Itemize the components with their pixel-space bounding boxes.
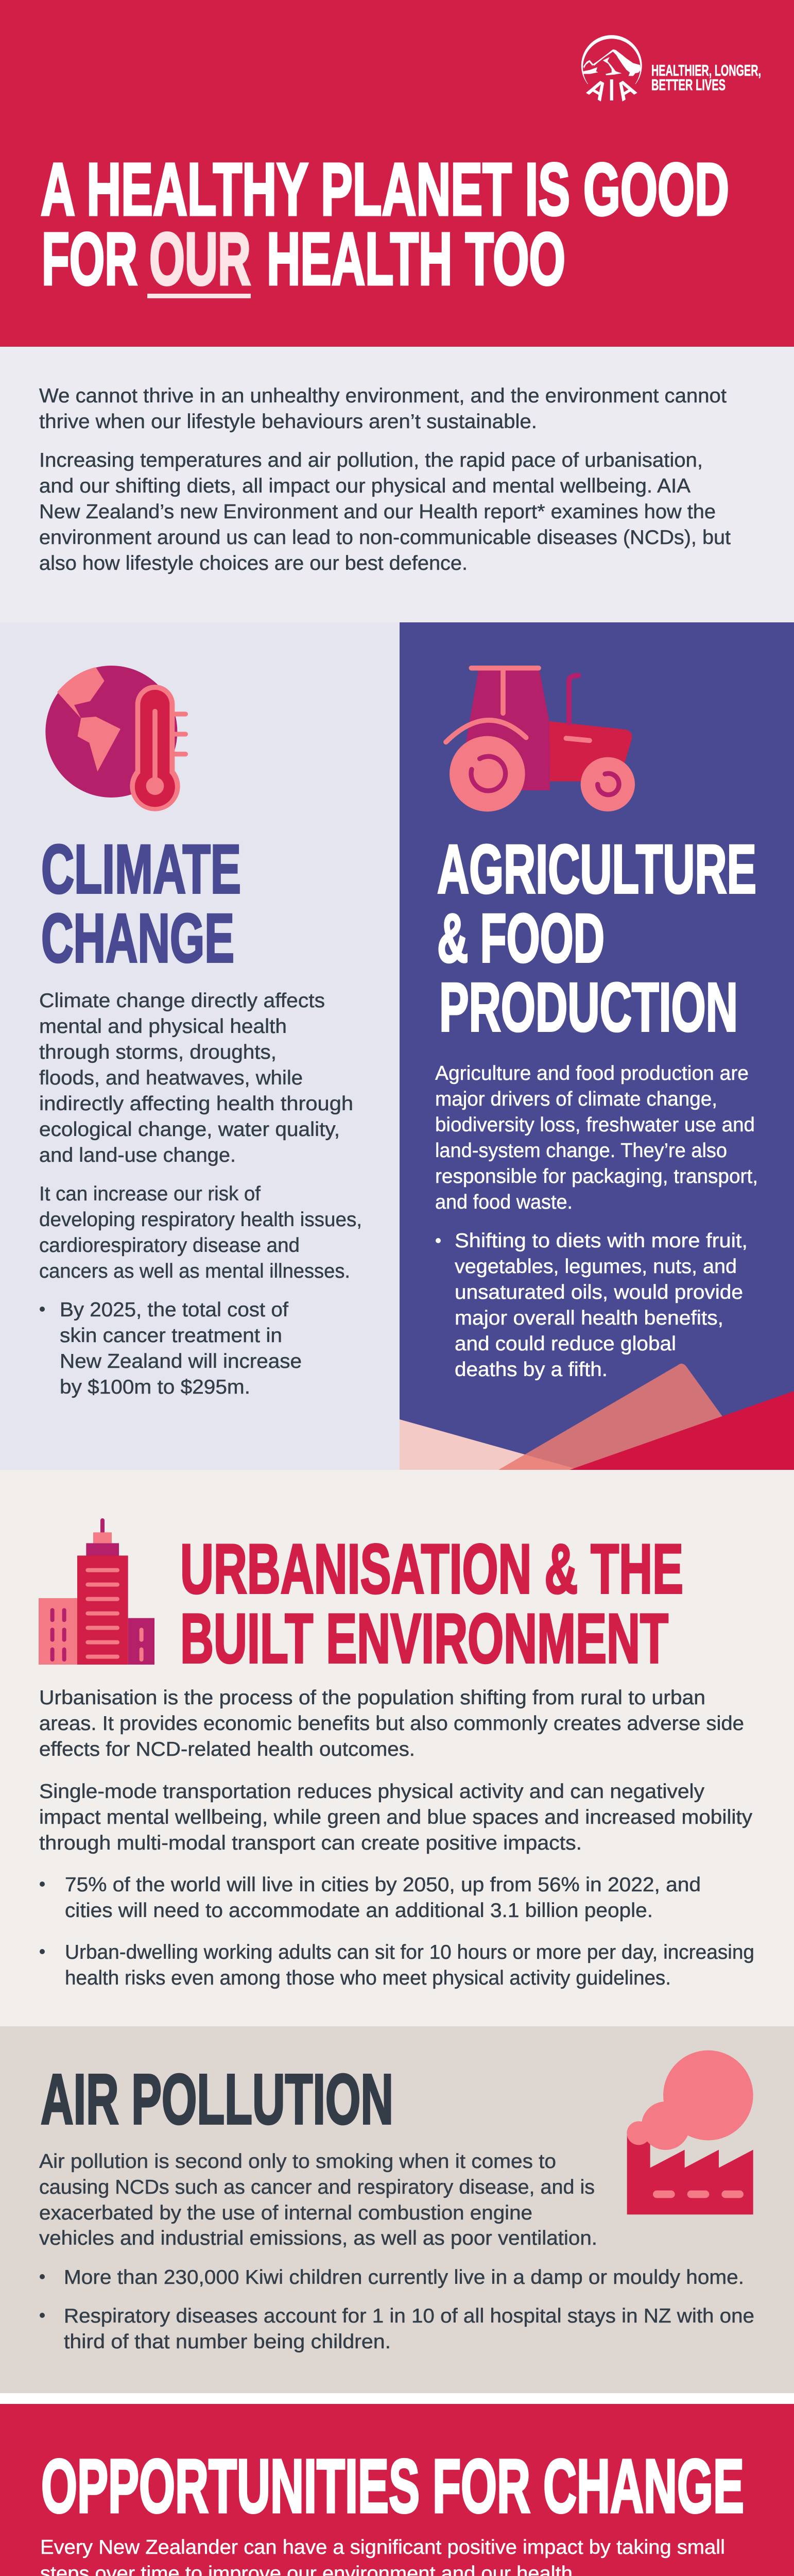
decorative corner shapes: agriculture [400, 1364, 794, 1470]
heading: urbanisation [180, 1530, 683, 1677]
icon: AIA logo: I [609, 73, 615, 107]
climate bullet: skin cancer treatment in [60, 1325, 282, 1347]
heading: air pollution: AIR POLLUTION [41, 2060, 393, 2139]
urbanisation bullet 2: Urban-dwelling working adults can sit for 10 hours or more per day, increasing [65, 1941, 754, 1963]
climate paragraph 1: Climate change directly affects [39, 990, 325, 1012]
urbanisation paragraph 1: areas. It provides economic benefits but also commonly creates adverse side [39, 1713, 744, 1735]
urbanisation paragraph 2: through multi-modal transport can create positive impacts. [39, 1832, 582, 1854]
tagline: BETTER LIVES [651, 76, 726, 94]
climate paragraph 2: developing respiratory health issues, [39, 1209, 362, 1231]
climate paragraph 1: indirectly affecting health through [39, 1093, 353, 1115]
title: FOR [42, 217, 137, 300]
climate bullet: By 2025, the total cost of [60, 1299, 288, 1321]
air pollution bullet 1: More than 230,000 Kiwi children currently live in a damp or mouldy home. [64, 2266, 744, 2289]
urbanisation bullet 1 [40, 1874, 701, 1922]
agriculture bullet [436, 1230, 748, 1381]
agriculture bullet: vegetables, legumes, nuts, and [455, 1256, 737, 1278]
heading: agriculture and food production: & FOOD [437, 900, 605, 977]
heading: climate change: CLIMATE [41, 831, 241, 908]
urbanisation bullet 1: 75% of the world will live in cities by 2050, up from 56% in 2022, and [65, 1874, 701, 1896]
climate paragraph 2 [39, 1183, 362, 1282]
climate paragraph 1: and land-use change. [39, 1144, 236, 1166]
climate paragraph 1 [39, 990, 353, 1166]
agriculture bullet: Shifting to diets with more fruit, [455, 1230, 748, 1252]
air pollution paragraph: Air pollution is second only to smoking when it comes to [39, 2150, 556, 2173]
agriculture paragraph: major drivers of climate change, [435, 1088, 717, 1110]
intro paragraph 1 [39, 385, 727, 433]
panel: agriculture and food production [400, 622, 794, 1470]
air pollution paragraph: exacerbated by the use of internal combustion engine [39, 2202, 532, 2224]
air pollution bullet 2: third of that number being children. [64, 2331, 391, 2353]
icon: AIA logo [581, 35, 642, 107]
urbanisation paragraph 1: effects for NCD-related health outcomes. [39, 1738, 415, 1760]
icon: AIA logo: A [610, 73, 641, 107]
climate paragraph 1: floods, and heatwaves, while [39, 1067, 303, 1089]
intro paragraph 1: thrive when our lifestyle behaviours aren’t sustainable. [39, 411, 537, 433]
urbanisation bullet 2: health risks even among those who meet physical activity guidelines. [65, 1967, 671, 1989]
agriculture paragraph [435, 1062, 758, 1213]
urbanisation paragraph 1: Urbanisation is the process of the population shifting from rural to urban [39, 1687, 705, 1709]
climate paragraph 2: cardiorespiratory disease and [39, 1234, 300, 1257]
opportunities subtext: Every New Zealander can have a significant positive impact by taking small [40, 2536, 725, 2558]
panel: opportunities for change [0, 2404, 794, 2576]
climate bullet [40, 1299, 302, 1398]
title [41, 148, 729, 300]
panel: header [0, 0, 794, 347]
intro paragraph 2 [39, 449, 731, 574]
icon: AIA logo: A [582, 73, 613, 107]
urbanisation paragraph 2: impact mental wellbeing, while green and blue spaces and increased mobility [39, 1806, 753, 1828]
agriculture bullet: unsaturated oils, would provide [455, 1281, 743, 1303]
urbanisation paragraph 2: Single-mode transportation reduces physical activity and can negatively [39, 1781, 705, 1803]
climate bullet: by $100m to $295m. [60, 1376, 250, 1398]
agriculture bullet: deaths by a fifth. [455, 1359, 608, 1381]
urbanisation paragraph 1 [39, 1687, 744, 1760]
icon: tractor [446, 668, 635, 811]
agriculture paragraph: Agriculture and food production are [435, 1062, 749, 1084]
climate bullet: New Zealand will increase [60, 1350, 302, 1372]
agriculture paragraph: and food waste. [435, 1191, 573, 1213]
icon: globe with thermometer [45, 666, 185, 811]
icon: city buildings [39, 1520, 154, 1665]
climate paragraph 2: It can increase our risk of [39, 1183, 261, 1205]
intro paragraph 2: New Zealand’s new Environment and our Health report* examines how the [39, 501, 716, 523]
air pollution paragraph: vehicles and industrial emissions, as well as poor ventilation. [39, 2227, 597, 2249]
urbanisation paragraph 2 [39, 1781, 753, 1854]
heading: climate change [41, 831, 241, 977]
agriculture paragraph: biodiversity loss, freshwater use and [435, 1114, 755, 1136]
tagline [651, 61, 761, 94]
urbanisation bullet 1: cities will need to accommodate an additional 3.1 billion people. [65, 1900, 653, 1922]
climate paragraph 2: cancers as well as mental illnesses. [39, 1260, 350, 1282]
climate paragraph 1: ecological change, water quality, [39, 1118, 340, 1141]
air pollution bullet 2 [40, 2305, 754, 2353]
heading: climate change: CHANGE [41, 900, 234, 977]
intro paragraph 2: also how lifestyle choices are our best defence. [39, 552, 468, 574]
heading: agriculture and food production [437, 831, 756, 1046]
panel: air pollution [0, 2026, 794, 2393]
intro paragraph 2: Increasing temperatures and air pollution, the rapid pace of urbanisation, [39, 449, 703, 471]
panel: introduction [0, 347, 794, 622]
agriculture bullet: major overall health benefits, [455, 1307, 723, 1329]
logo: AIA with tagline [581, 35, 761, 107]
opportunities subtext [40, 2536, 725, 2576]
climate paragraph 1: mental and physical health [39, 1015, 287, 1038]
climate paragraph 1: through storms, droughts, [39, 1041, 277, 1063]
intro paragraph 2: and our shifting diets, all impact our physical and mental wellbeing. AIA [39, 475, 691, 497]
title: OUR [149, 217, 251, 300]
icon: factory with smoke [627, 2050, 753, 2214]
air pollution bullet 2: Respiratory diseases account for 1 in 10 of all hospital stays in NZ with one [64, 2305, 754, 2327]
intro paragraph 1: We cannot thrive in an unhealthy environment, and the environment cannot [39, 385, 727, 407]
agriculture bullet: and could reduce global [455, 1333, 676, 1355]
air pollution paragraph: causing NCDs such as cancer and respiratory disease, and is [39, 2176, 595, 2198]
panel: urbanisation and the built environment [0, 1470, 794, 2026]
agriculture paragraph: responsible for packaging, transport, [435, 1165, 758, 1188]
intro paragraph 2: environment around us can lead to non-communicable diseases (NCDs), but [39, 527, 731, 549]
agriculture paragraph: land-system change. They’re also [435, 1140, 727, 1162]
urbanisation bullet 2 [40, 1941, 754, 1989]
title: HEALTH TOO [267, 217, 565, 300]
panel: climate change [0, 622, 400, 1470]
air pollution paragraph [39, 2150, 597, 2249]
